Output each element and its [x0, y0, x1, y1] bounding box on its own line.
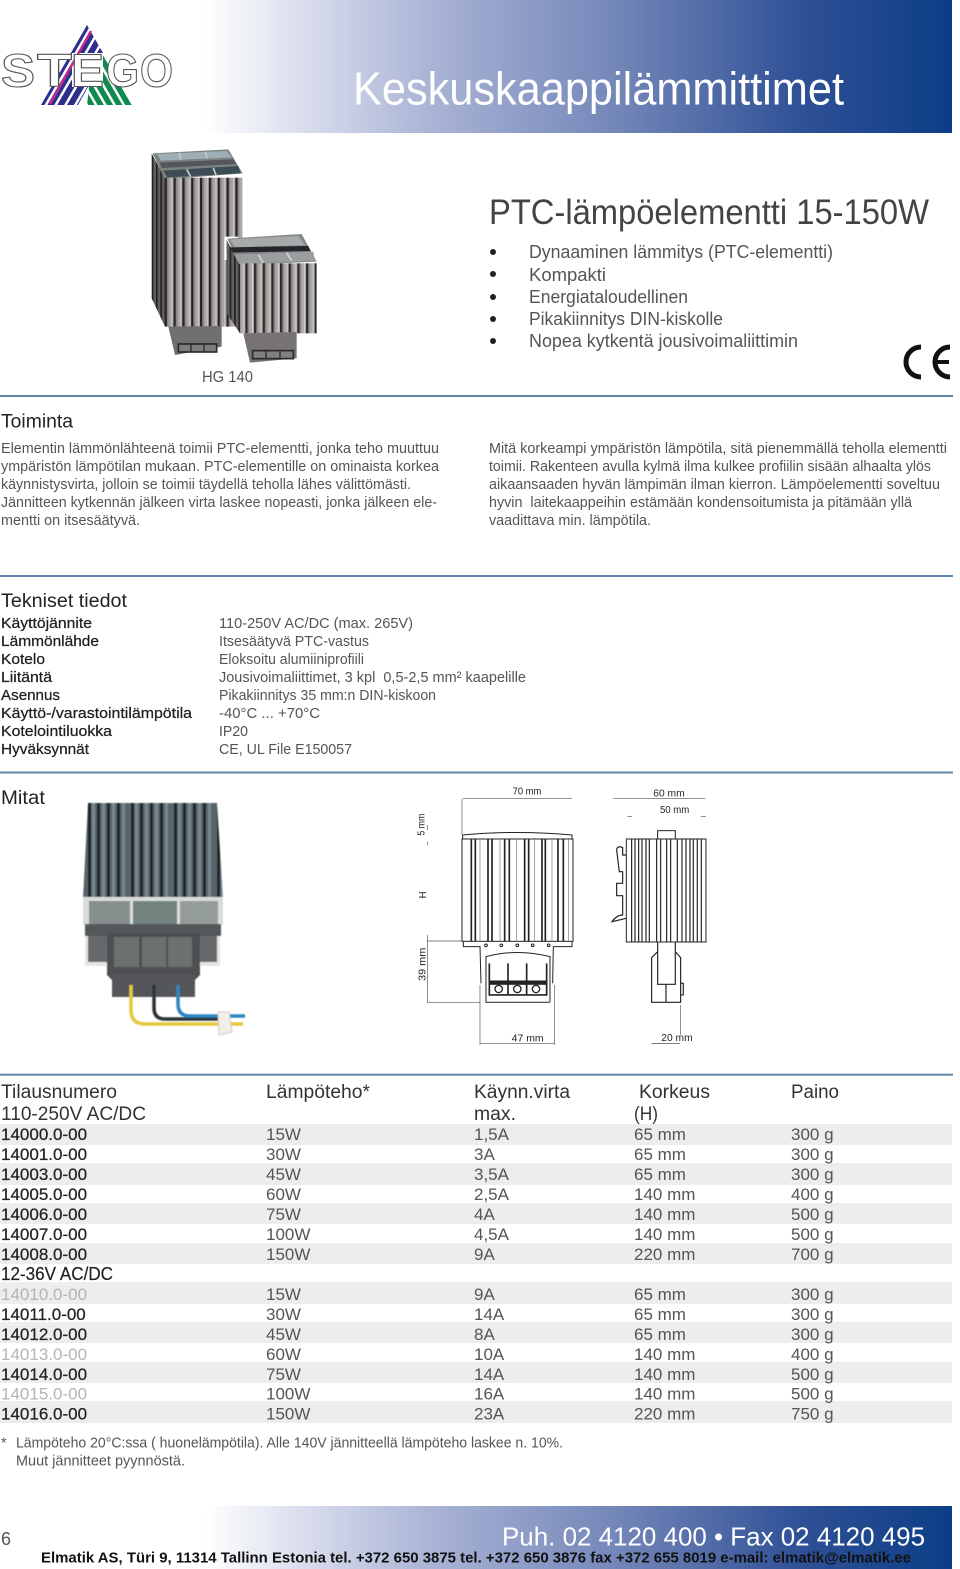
- table row group: 110-250V: 700 g: [791, 1245, 834, 1264]
- table row group: 12-36V: 14016.0-00: [1, 1404, 87, 1424]
- footer band: [205, 1506, 952, 1569]
- spec values: [219, 615, 526, 758]
- table row group: 110-250V: 140 mm: [634, 1185, 695, 1204]
- footnote: [1, 1436, 563, 1470]
- table row group: 110-250V: 220 mm: [634, 1245, 695, 1264]
- DIN clip: [612, 847, 626, 922]
- table header: max.: [474, 1104, 516, 1125]
- spec values: 110-250V AC/DC (max. 265V): [219, 615, 413, 632]
- right text column: vaadittava min. lämpötila.: [489, 513, 651, 529]
- table row group: 110-250V: 14000.0-00: [1, 1125, 87, 1144]
- left text column: Jännitteen kytkennän jälkeen virta laskee nopeasti, jonka jälkeen ele-: [1, 495, 437, 511]
- table row group: 110-250V: 500 g: [791, 1205, 834, 1224]
- footnote: *: [1, 1436, 7, 1452]
- STEGO logo: [1, 25, 173, 105]
- body: [626, 839, 706, 942]
- table row group: 12-36V: 140 mm: [634, 1384, 695, 1404]
- table row group: 12-36V: 14A: [474, 1305, 505, 1324]
- spec labels: [1, 615, 193, 758]
- logo wordmark: O: [140, 44, 173, 96]
- spec labels: Liitäntä: [1, 669, 53, 686]
- table row group: 110-250V: 14006.0-00: [1, 1205, 87, 1224]
- right text column: Mitä korkeampi ympäristön lämpötila, sitä pienemmällä teholla elementti: [489, 441, 947, 457]
- dimension drawing: front view: [417, 786, 573, 1045]
- table row group: 110-250V: 15W: [266, 1125, 301, 1144]
- feature list: [490, 241, 833, 351]
- left text column: mentti on itsesäätyvä.: [1, 513, 140, 529]
- contact phone and fax: Puh. 02 4120 400 • Fax 02 4120 495: [502, 1522, 925, 1552]
- table row group: 12-36V: 400 g: [791, 1345, 834, 1364]
- footnote: Muut jännitteet pyynnöstä.: [16, 1454, 185, 1470]
- small heater: [224, 234, 317, 363]
- dimension labels: 47 mm: [512, 1034, 544, 1045]
- product table: [0, 1082, 952, 1424]
- spec labels: Kotelo: [1, 651, 45, 668]
- table row group: 12-36V: 220 mm: [634, 1404, 695, 1424]
- table row group: 12-36V: 14015.0-00: [1, 1384, 87, 1404]
- table row group: 12-36V: 8A: [474, 1325, 495, 1344]
- spec values: IP20: [219, 723, 248, 740]
- table row group: 12-36V: 500 g: [791, 1384, 834, 1404]
- table row group: 12-36V: 150W: [266, 1404, 310, 1424]
- table header: Korkeus: [639, 1082, 710, 1103]
- table row group: 12-36V: 9A: [474, 1285, 495, 1304]
- table row group: 12-36V: 75W: [266, 1365, 301, 1384]
- spec labels: Käyttö-/varastointilämpötila: [1, 705, 193, 722]
- feature list: Pikakiinnitys DIN-kiskolle: [529, 308, 723, 329]
- table row group: 12-36V: 750 g: [791, 1404, 834, 1424]
- page number: 6: [1, 1529, 11, 1549]
- table row group: 12-36V: 15W: [266, 1285, 301, 1304]
- spec values: Itsesäätyvä PTC-vastus: [219, 633, 369, 650]
- section heading: Mitat: Mitat: [1, 788, 46, 809]
- table row group: 12-36V: 14014.0-00: [1, 1365, 87, 1384]
- spec labels: Asennus: [1, 687, 60, 704]
- terminal side: [652, 942, 683, 1002]
- dimension labels: 39 mm: [417, 948, 428, 981]
- wires: [131, 985, 245, 1024]
- large heater: [152, 149, 243, 355]
- table row group: 110-250V: 150W: [266, 1245, 310, 1264]
- table row group: 12-36V: 30W: [266, 1305, 301, 1324]
- table row group: 12-36V: 16A: [474, 1384, 505, 1404]
- logo wordmark: E: [71, 44, 104, 96]
- table header: Tilausnumero: [1, 1082, 117, 1103]
- table row group: 110-250V: 65 mm: [634, 1145, 686, 1164]
- table row group: 12-36V: 300 g: [791, 1325, 834, 1344]
- table row group: 110-250V: 3,5A: [474, 1165, 510, 1184]
- left text column: [1, 441, 439, 529]
- table row group: 12-36V: 14010.0-00: [1, 1285, 87, 1304]
- table row group: 110-250V: 14001.0-00: [1, 1145, 87, 1164]
- table row group: 110-250V: 14003.0-00: [1, 1165, 87, 1184]
- product photo: heater with wires: [83, 803, 245, 1035]
- product heading: PTC-lämpöelementti 15-150W: [489, 193, 929, 232]
- spec values: CE, UL File E150057: [219, 741, 352, 758]
- table row group: 12-36V: 300 g: [791, 1305, 834, 1324]
- width dimensions: 20 mm: [661, 1033, 693, 1044]
- heading: Toiminta: [1, 412, 73, 432]
- table row group: 110-250V: 14008.0-00: [1, 1245, 87, 1264]
- table row group: 110-250V: 65 mm: [634, 1165, 686, 1184]
- table row group: 110-250V: 14007.0-00: [1, 1225, 87, 1244]
- icon: CE mark: [906, 347, 950, 377]
- spec labels: Lämmönlähde: [1, 633, 99, 650]
- table stripes: [0, 1124, 952, 1423]
- dimension labels: H: [418, 891, 429, 898]
- section: Toiminta: [1, 412, 947, 529]
- spec values: Eloksoitu alumiiniprofiili: [219, 651, 364, 668]
- left text column: Elementin lämmönlähteenä toimii PTC-elementti, jonka teho muuttuu: [1, 441, 439, 457]
- table row group: 110-250V: 4A: [474, 1205, 495, 1224]
- table row group: 110-250V: 14005.0-00: [1, 1185, 87, 1204]
- table header: Paino: [791, 1082, 839, 1103]
- width dimensions: 50 mm: [660, 805, 689, 816]
- table row group: 12-36V: 60W: [266, 1345, 301, 1364]
- section: Tekniset tiedot: [1, 591, 526, 758]
- table row group: 12-36V: 140 mm: [634, 1365, 695, 1384]
- table row group: 12-36V: 500 g: [791, 1365, 834, 1384]
- table row group: 110-250V: 300 g: [791, 1165, 834, 1184]
- table row group: 110-250V: 60W: [266, 1185, 301, 1204]
- table header: Käynn.virta: [474, 1082, 570, 1103]
- table header: (H): [634, 1104, 658, 1125]
- product caption: HG 140: [202, 369, 253, 386]
- feature list: Kompakti: [529, 264, 606, 285]
- table row group: 110-250V: 9A: [474, 1245, 495, 1264]
- table row group: 12-36V: 300 g: [791, 1285, 834, 1304]
- table row group: 12-36V: 14012.0-00: [1, 1325, 87, 1344]
- table row group: 12-36V: 45W: [266, 1325, 301, 1344]
- table row group: 12-36V: [1, 1285, 834, 1424]
- product photo: HG 140 heaters: [152, 149, 317, 363]
- table row group: 12-36V: 100W: [266, 1384, 310, 1404]
- feature list: Energiataloudellinen: [529, 286, 688, 307]
- width dimensions: [653, 788, 693, 1044]
- header band: [205, 0, 952, 133]
- table row group: 110-250V: 4,5A: [474, 1225, 510, 1244]
- table row group: 110-250V: 300 g: [791, 1145, 834, 1164]
- table row group: 110-250V: 140 mm: [634, 1225, 695, 1244]
- page title: Keskuskaappilämmittimet: [353, 62, 844, 114]
- logo wordmark: G: [106, 44, 139, 96]
- logo triangle: [41, 25, 134, 105]
- logo wordmark: S: [1, 44, 35, 96]
- dimension labels: 5 mm: [417, 814, 428, 836]
- table row group: 12-36V: 65 mm: [634, 1305, 686, 1324]
- table row group: 110-250V: 2,5A: [474, 1185, 510, 1204]
- feature list: Dynaaminen lämmitys (PTC-elementti): [529, 241, 833, 262]
- table row group: 110-250V: 1,5A: [474, 1125, 510, 1144]
- dimension labels: [417, 814, 544, 1045]
- footnote: Lämpöteho 20°C:ssa ( huonelämpötila). Alle 140V jännitteellä lämpöteho laskee n. 10%.: [16, 1436, 563, 1452]
- table row group: 12-36V: 65 mm: [634, 1285, 686, 1304]
- extension lines: [427, 825, 555, 1045]
- right text column: hyvin laitekaappeihin estämään kondensoitumista ja pitämään yllä: [489, 495, 912, 511]
- logo wordmark: T: [37, 44, 72, 96]
- spec labels: Kotelointiluokka: [1, 723, 113, 740]
- spec values: Pikakiinnitys 35 mm:n DIN-kiskoon: [219, 687, 436, 704]
- table row group: 110-250V: 500 g: [791, 1225, 834, 1244]
- left text column: ympäristön lämpötilan mukaan. PTC-elementille on ominaista korkea: [1, 459, 439, 475]
- table row group: 12-36V: 14013.0-00: [1, 1345, 87, 1364]
- terminal block: [463, 942, 572, 1002]
- table row group: 12-36V: 23A: [474, 1404, 505, 1424]
- table subheading: 12-36V: 12-36V AC/DC: [1, 1264, 113, 1284]
- table row group: 110-250V: 100W: [266, 1225, 310, 1244]
- table row group: 110-250V: 30W: [266, 1145, 301, 1164]
- right text column: [489, 441, 947, 529]
- table row group: 110-250V: 140 mm: [634, 1205, 695, 1224]
- table header: 110-250V AC/DC: [1, 1104, 146, 1125]
- right text column: toimii. Rakenteen avulla kylmä ilma kulkee profiilin sisään alhaalta ylös: [489, 459, 931, 475]
- table row group: 110-250V: [1, 1125, 834, 1264]
- table row group: 12-36V: 65 mm: [634, 1325, 686, 1344]
- width dimension 70 mm: [462, 786, 572, 835]
- spec labels: Hyväksynnät: [1, 741, 90, 758]
- spec labels: Käyttöjännite: [1, 615, 92, 632]
- wire clip: [218, 1012, 232, 1035]
- heading: Tekniset tiedot: [1, 591, 128, 612]
- dimension drawing: side view: [612, 788, 706, 1044]
- table row group: 12-36V: 140 mm: [634, 1345, 695, 1364]
- spec values: -40°C ... +70°C: [219, 705, 320, 722]
- table row group: 12-36V: 14011.0-00: [1, 1305, 86, 1324]
- table row group: 110-250V: 75W: [266, 1205, 301, 1224]
- logo wordmark: [1, 44, 173, 96]
- table row group: 110-250V: 3A: [474, 1145, 495, 1164]
- body: [463, 832, 572, 839]
- right text column: aikaansaaden hyvän lämpimän ilman kierron. Lämpöelementti soveltuu: [489, 477, 940, 493]
- table row group: 12-36V: 14A: [474, 1365, 505, 1384]
- spec values: Jousivoimaliittimet, 3 kpl 0,5-2,5 mm² kaapelille: [219, 669, 526, 686]
- table row group: 110-250V: 400 g: [791, 1185, 834, 1204]
- width dimensions: 60 mm: [653, 788, 685, 799]
- company contact line: Elmatik AS, Türi 9, 11314 Tallinn Estonia tel. +372 650 3875 tel. +372 650 3876 fax +372 655 8019 e-mail: elmatik@elmatik.ee: [41, 1550, 911, 1566]
- table row group: 110-250V: 45W: [266, 1165, 301, 1184]
- table header: Lämpöteho*: [266, 1082, 371, 1103]
- table row group: 12-36V: 10A: [474, 1345, 505, 1364]
- feature list: Nopea kytkentä jousivoimaliittimin: [529, 330, 798, 351]
- table header: [1, 1082, 839, 1125]
- table row group: 110-250V: 65 mm: [634, 1125, 686, 1144]
- left text column: käynnistysvirta, jolloin se toimii täydellä teholla lähes välittömästi.: [1, 477, 411, 493]
- table row group: 110-250V: 300 g: [791, 1125, 834, 1144]
- width dimension 70 mm: 70 mm: [513, 786, 541, 797]
